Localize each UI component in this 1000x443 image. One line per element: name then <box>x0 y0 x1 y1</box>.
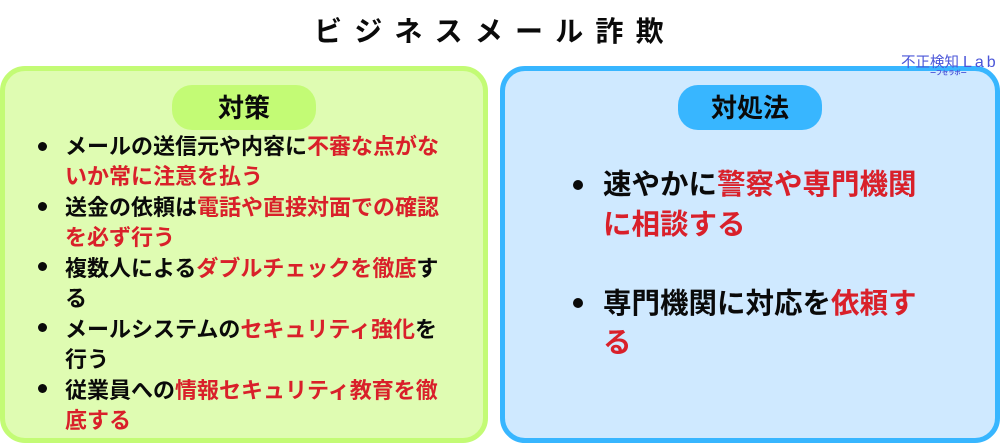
item 1 line 1: 速やかに警察や専門機関 <box>603 169 917 201</box>
bullet 2 <box>38 202 47 211</box>
item 4 line 2: 行う <box>65 347 109 372</box>
bullet 1 <box>573 180 583 190</box>
item 2 line 2: る <box>603 327 632 359</box>
heading: countermeasures: 対策 <box>218 92 270 122</box>
bullet 1 <box>38 142 47 151</box>
item 5 line 1: 従業員への情報セキュリティ教育を徹 <box>65 378 438 403</box>
panel: response <box>500 66 1000 443</box>
list: countermeasures <box>38 134 439 433</box>
logo subtitle: ーフセラボー <box>930 70 967 77</box>
item 1 line 1: メールの送信元や内容に不審な点がな <box>65 134 439 159</box>
panel: countermeasures <box>0 66 488 443</box>
item 2 line 1: 専門機関に対応を依頼す <box>603 288 917 320</box>
bullet 4 <box>38 323 47 332</box>
logo text: 不正検知 <box>901 55 959 71</box>
bullet 3 <box>38 262 47 271</box>
bullet 5 <box>38 384 47 393</box>
item 2 line 1: 送金の依頼は電話や直接対面での確認 <box>65 195 439 220</box>
item 3 line 2: る <box>65 286 87 311</box>
item 2 line 2: を必ず行う <box>65 225 175 250</box>
list: response <box>573 169 917 359</box>
item 5 line 2: 底する <box>65 408 131 433</box>
title: ビジネスメール詐欺 <box>314 16 676 47</box>
item 1 line 2: に相談する <box>603 209 746 241</box>
heading: response <box>678 85 822 130</box>
item 4 line 1: メールシステムのセキュリティ強化を <box>65 317 437 342</box>
heading: countermeasures <box>172 85 316 130</box>
heading: response: 対処法 <box>711 92 789 122</box>
logo latin text: Lab <box>963 54 999 71</box>
item 3 line 1: 複数人によるダブルチェックを徹底す <box>65 256 438 281</box>
bullet 2 <box>573 298 583 308</box>
item 1 line 2: いか常に注意を払う <box>65 164 263 189</box>
logo <box>901 54 999 77</box>
